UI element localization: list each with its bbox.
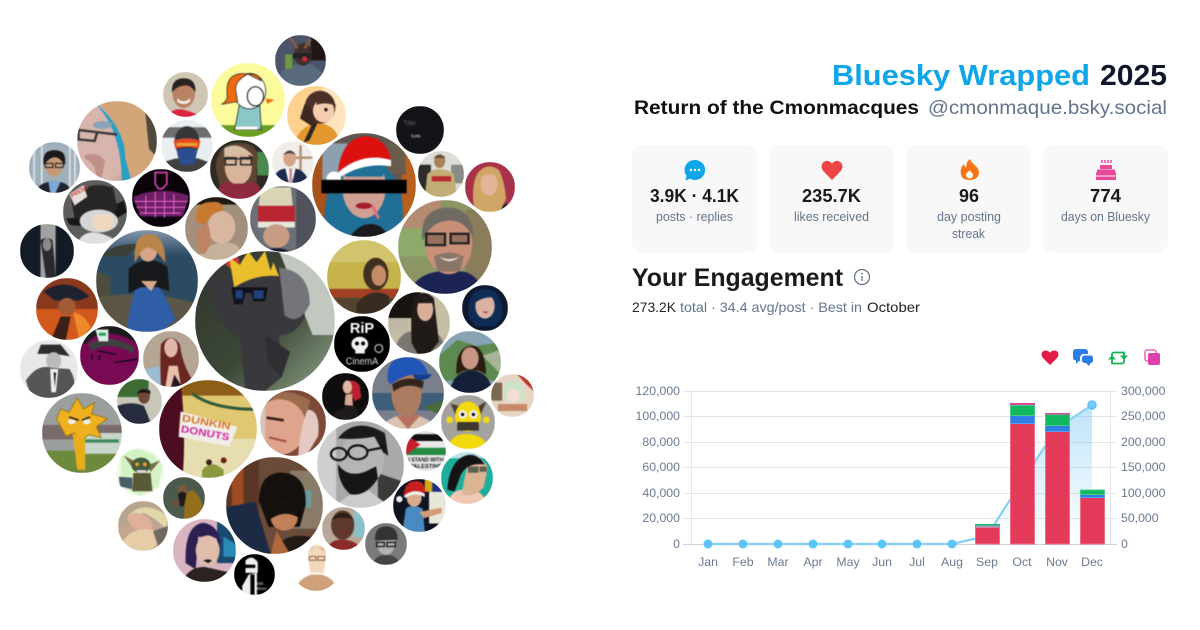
stat card: posts and replies: posts · replies bbox=[656, 210, 733, 224]
avatar: pink outline bbox=[132, 169, 190, 227]
avatar: purple cartoon bbox=[80, 326, 139, 385]
month labels: Apr bbox=[803, 555, 823, 569]
month labels: Aug bbox=[941, 555, 963, 569]
icon: likes legend bbox=[1042, 351, 1058, 365]
grid lines bbox=[683, 391, 1117, 544]
chart bbox=[636, 384, 1166, 569]
avatar: reindeer antlers bbox=[275, 35, 326, 86]
month labels: Jun bbox=[872, 555, 892, 569]
icon: quotes legend bbox=[1145, 350, 1160, 365]
engagement summary: total · 34.4 avg/post · Best in bbox=[680, 299, 862, 315]
left axis labels: 100,000 bbox=[636, 409, 680, 423]
stat card: likes: 235.7K bbox=[802, 185, 862, 206]
month labels: Nov bbox=[1046, 555, 1069, 569]
engagement summary: October bbox=[867, 299, 920, 315]
stat card: streak bbox=[906, 145, 1031, 253]
right axis labels: 150,000 bbox=[1121, 460, 1166, 474]
icon: info bbox=[854, 270, 870, 284]
avatar: palestine solidarity bbox=[406, 431, 446, 471]
right axis labels: 200,000 bbox=[1121, 435, 1166, 449]
avatar: Dunkin Donuts scene: DONUTS bbox=[180, 424, 231, 443]
month labels: Dec bbox=[1081, 555, 1103, 569]
avatar: kid in santa hat bbox=[393, 479, 446, 532]
chart legend icons bbox=[1042, 349, 1160, 366]
avatar: dark haired woman bbox=[388, 292, 450, 354]
avatar: ginger man bbox=[185, 197, 248, 260]
bar: September bbox=[975, 524, 1000, 544]
stat card: posts and replies bbox=[632, 145, 757, 253]
avatar: anime girl bbox=[287, 86, 346, 145]
month labels: Oct bbox=[1012, 555, 1032, 569]
avatar: racing man bbox=[418, 151, 464, 197]
avatar: press hat cartoon bbox=[63, 180, 127, 244]
avatar: purple haired woman bbox=[173, 519, 236, 582]
left axis labels: 40,000 bbox=[642, 486, 680, 500]
left axis labels: 120,000 bbox=[636, 384, 680, 398]
avatar: painting man bbox=[163, 477, 205, 519]
avatar: blonde woman bbox=[465, 162, 515, 212]
section heading: your engagement: Your Engagement bbox=[632, 264, 844, 292]
avatar: title black: butts bbox=[411, 134, 421, 139]
avatar: santa hat blue hair bbox=[312, 133, 416, 237]
left axis labels: 60,000 bbox=[642, 460, 680, 474]
avatar: palestine solidarity: PALESTINE bbox=[410, 464, 443, 470]
bar: December bbox=[1080, 490, 1104, 544]
month labels: Feb bbox=[732, 555, 754, 569]
avatar: yellow horned cartoon bbox=[441, 395, 495, 449]
avatar: smiling man bbox=[163, 72, 208, 117]
avatar: black and white hooded bbox=[234, 554, 275, 595]
avatar: hiker woman bbox=[439, 331, 501, 393]
avatar: black and white hooded: inbi bbox=[257, 581, 263, 586]
stat card: likes: likes received bbox=[794, 210, 869, 224]
avatar collage bbox=[20, 35, 534, 595]
avatar: curly haired woman bbox=[226, 457, 323, 554]
icon: reposts legend bbox=[1108, 352, 1128, 364]
avatar: red haired woman bbox=[143, 331, 199, 387]
avatar: rip cinema skull bbox=[334, 316, 390, 372]
avatar: red hair profile bbox=[322, 373, 369, 420]
avatar: title black bbox=[396, 106, 444, 154]
avatar: blurry woman bbox=[327, 240, 401, 314]
avatar: ski mask bbox=[161, 120, 213, 172]
display name and handle bbox=[634, 97, 1167, 119]
avatar: rip cinema skull: CinemA bbox=[346, 357, 378, 368]
avatar: blue streak hair bbox=[77, 101, 157, 181]
avatar: sketch man bbox=[298, 544, 334, 591]
right axis labels: 50,000 bbox=[1121, 511, 1159, 525]
avatar: palestine solidarity: I STAND WITH bbox=[408, 457, 444, 463]
avatar: press hat cartoon: PRESS bbox=[70, 185, 90, 200]
bar: November bbox=[1045, 413, 1070, 544]
month labels: Jan bbox=[698, 555, 718, 569]
avatar: black and white hooded: kinos bbox=[257, 586, 267, 591]
avatar: smiling man with glasses bbox=[398, 200, 492, 294]
stat card: streak: streak bbox=[952, 227, 986, 241]
left axis labels: 0 bbox=[673, 537, 680, 551]
avatar: military hat bbox=[250, 186, 316, 252]
avatar: man face close-up bbox=[260, 390, 326, 456]
avatar: grey portrait bbox=[20, 224, 74, 278]
display name and handle: Return of the Cmonmacques bbox=[634, 97, 919, 119]
right axis labels: 100,000 bbox=[1121, 486, 1166, 500]
left axis labels: 80,000 bbox=[642, 435, 680, 449]
cumulative area and line bbox=[704, 401, 1096, 548]
avatar: asian man in suit bbox=[29, 142, 80, 193]
month labels: May bbox=[836, 555, 860, 569]
avatar: title black: Title bbox=[403, 120, 416, 127]
right axis labels: 300,000 bbox=[1121, 384, 1166, 398]
stat card: posts and replies: 3.9K · 4.1K bbox=[650, 185, 740, 206]
avatar: gray cap man bbox=[365, 523, 407, 565]
avatar: woman with cat bbox=[118, 501, 168, 551]
avatar: blue haired woman bbox=[462, 285, 508, 331]
avatar: gremlin bbox=[116, 448, 164, 496]
month labels: Mar bbox=[767, 555, 789, 569]
avatar: rip cinema skull: RiP bbox=[350, 321, 374, 337]
avatar: glasses woman scarf bbox=[210, 140, 269, 199]
left axis labels bbox=[636, 384, 680, 551]
stat card: streak: 96 bbox=[959, 185, 979, 206]
right axis labels bbox=[1121, 384, 1166, 551]
avatar: elephant with crown and sunglasses bbox=[195, 251, 335, 391]
bar: October bbox=[1010, 403, 1035, 544]
stat card: days on Bluesky: 774 bbox=[1090, 185, 1122, 206]
avatar: Dunkin Donuts scene bbox=[159, 380, 257, 478]
avatar: man in blue LA cap bbox=[372, 357, 444, 429]
month labels: Jul bbox=[909, 555, 925, 569]
right axis labels: 0 bbox=[1121, 537, 1128, 551]
stat card: streak: day posting bbox=[937, 210, 1001, 224]
left axis labels: 20,000 bbox=[642, 511, 680, 525]
avatar: red cap art bbox=[36, 278, 98, 340]
engagement summary: 273.2K bbox=[632, 299, 677, 315]
title: Bluesky Wrapped bbox=[832, 60, 1090, 92]
stat card: days on Bluesky bbox=[1043, 145, 1168, 253]
month labels: Sep bbox=[976, 555, 998, 569]
month labels bbox=[698, 555, 1103, 569]
icon: replies legend bbox=[1073, 349, 1093, 366]
display name and handle: @cmonmaque.bsky.social bbox=[928, 97, 1167, 119]
avatar: pastel anime bbox=[491, 374, 534, 417]
avatar: old photo man bbox=[20, 340, 78, 398]
stat card: likes bbox=[769, 145, 894, 253]
avatar: Kronk sunglasses bbox=[441, 452, 493, 504]
avatar: woman selfie bbox=[322, 507, 365, 550]
stat card: days on Bluesky: days on Bluesky bbox=[1061, 210, 1151, 224]
avatar: woman in blue dress bbox=[96, 230, 198, 332]
avatar: man with braids bbox=[117, 379, 162, 424]
avatar: sun mascot bbox=[42, 393, 122, 473]
right column bbox=[620, 0, 1200, 630]
right axis labels: 250,000 bbox=[1121, 409, 1166, 423]
avatar: man in suit bbox=[272, 141, 314, 183]
avatar: bearded man black and white bbox=[317, 421, 404, 508]
avatar: yellow cartoon cat bbox=[211, 63, 285, 137]
avatar: Dunkin Donuts scene: DUNKIN bbox=[181, 413, 231, 433]
title: 2025 bbox=[1100, 60, 1167, 92]
engagement summary bbox=[632, 299, 920, 315]
